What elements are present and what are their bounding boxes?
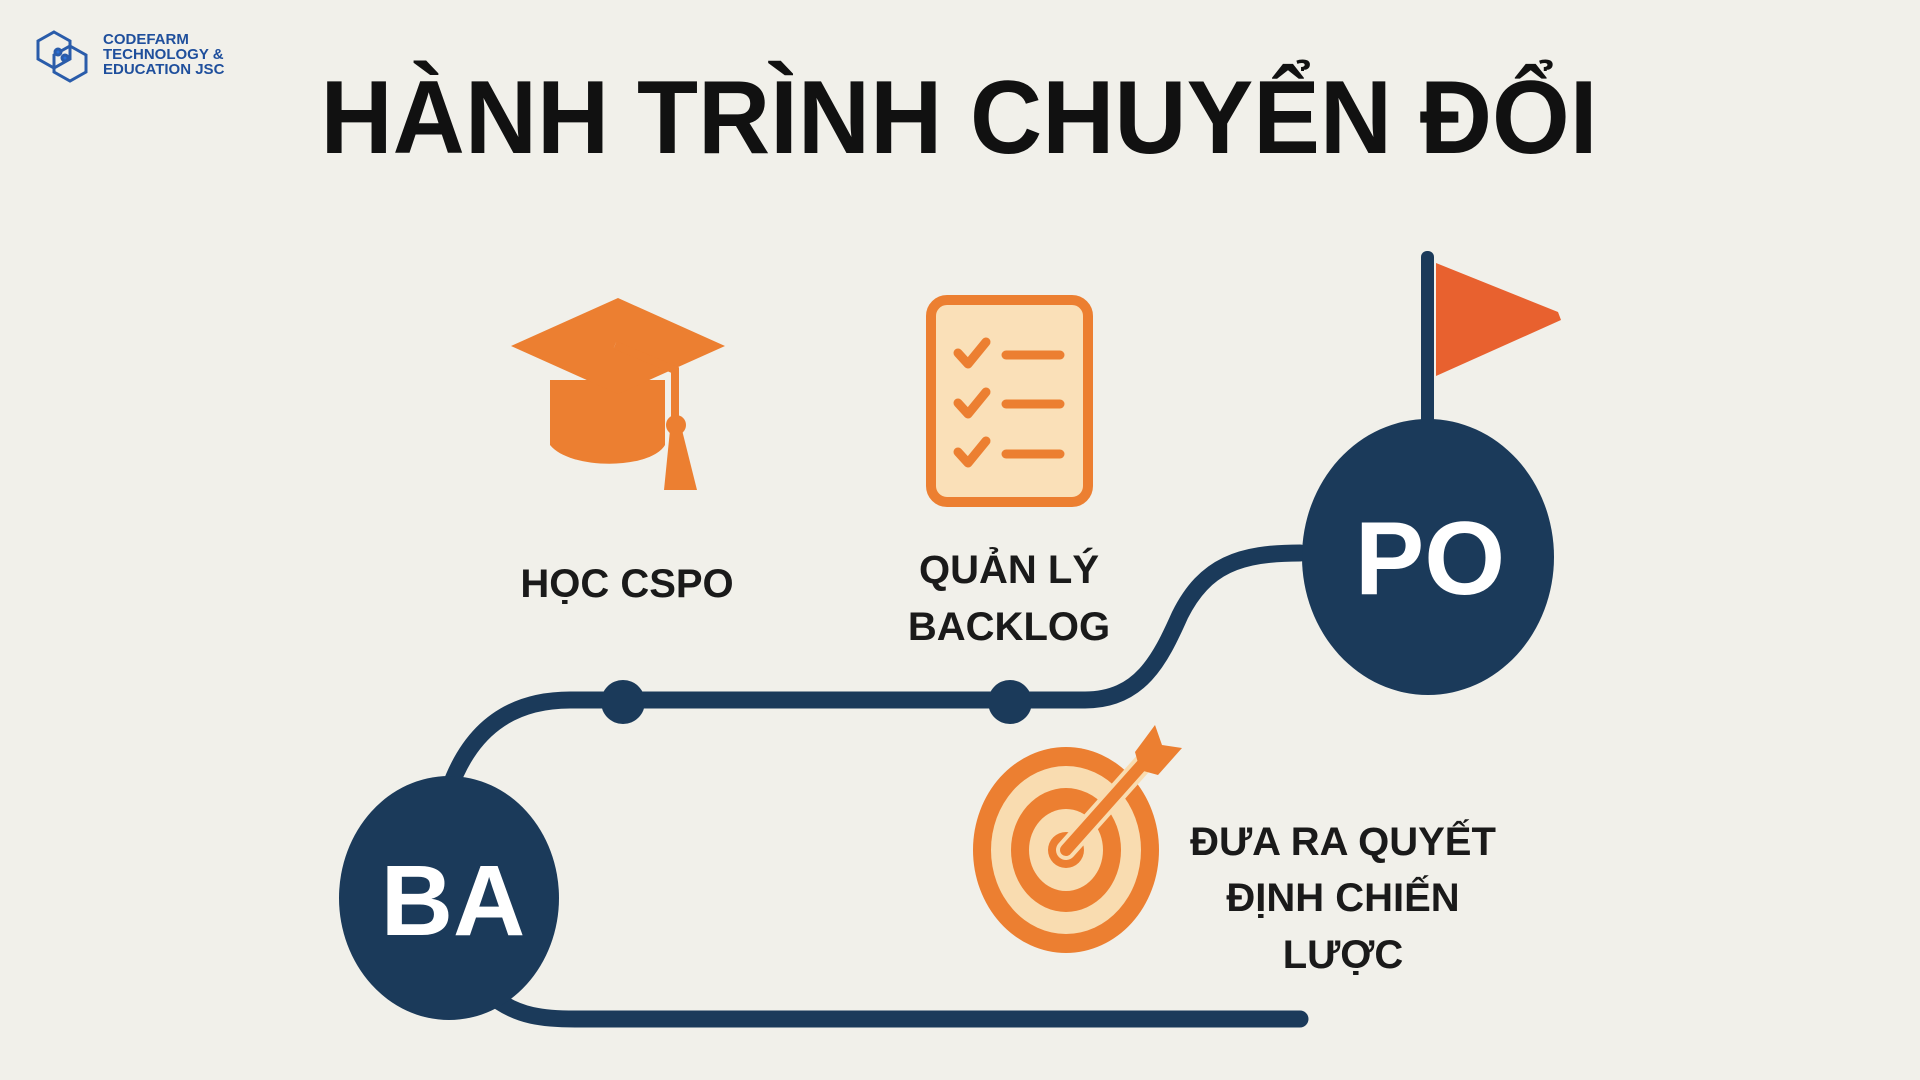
icon: graduation cap — [511, 298, 725, 490]
icon: flag — [1421, 251, 1561, 426]
logo: TECHNOLOGY & — [103, 46, 224, 63]
label: quan ly backlog — [908, 546, 1110, 649]
icon: checklist — [931, 300, 1088, 502]
label: quan ly backlog: BACKLOG — [908, 605, 1110, 649]
milestone dots — [601, 680, 1032, 724]
BA circle — [339, 776, 559, 1020]
label: dua ra quyet dinh chien luoc: ĐƯA RA QUYẾT — [1190, 818, 1496, 864]
path: road — [449, 553, 1300, 1019]
title: HÀNH TRÌNH CHUYỂN ĐỔI — [320, 59, 1598, 176]
icon: logo hexagons — [38, 32, 86, 81]
label: hoc cspo: HỌC CSPO — [520, 562, 734, 606]
icon: target — [973, 725, 1182, 953]
label: dua ra quyet dinh chien luoc — [1190, 818, 1496, 977]
label: quan ly backlog: QUẢN LÝ — [919, 546, 1099, 592]
PO circle — [1302, 419, 1554, 695]
logo: EDUCATION JSC — [103, 61, 225, 78]
logo text: CODEFARM — [103, 31, 189, 48]
label: dua ra quyet dinh chien luoc: LƯỢC — [1283, 933, 1403, 977]
PO circle: PO — [1355, 501, 1505, 617]
label: dua ra quyet dinh chien luoc: ĐỊNH CHIẾN — [1226, 874, 1460, 920]
logo — [38, 31, 225, 81]
BA circle: BA — [381, 845, 525, 957]
